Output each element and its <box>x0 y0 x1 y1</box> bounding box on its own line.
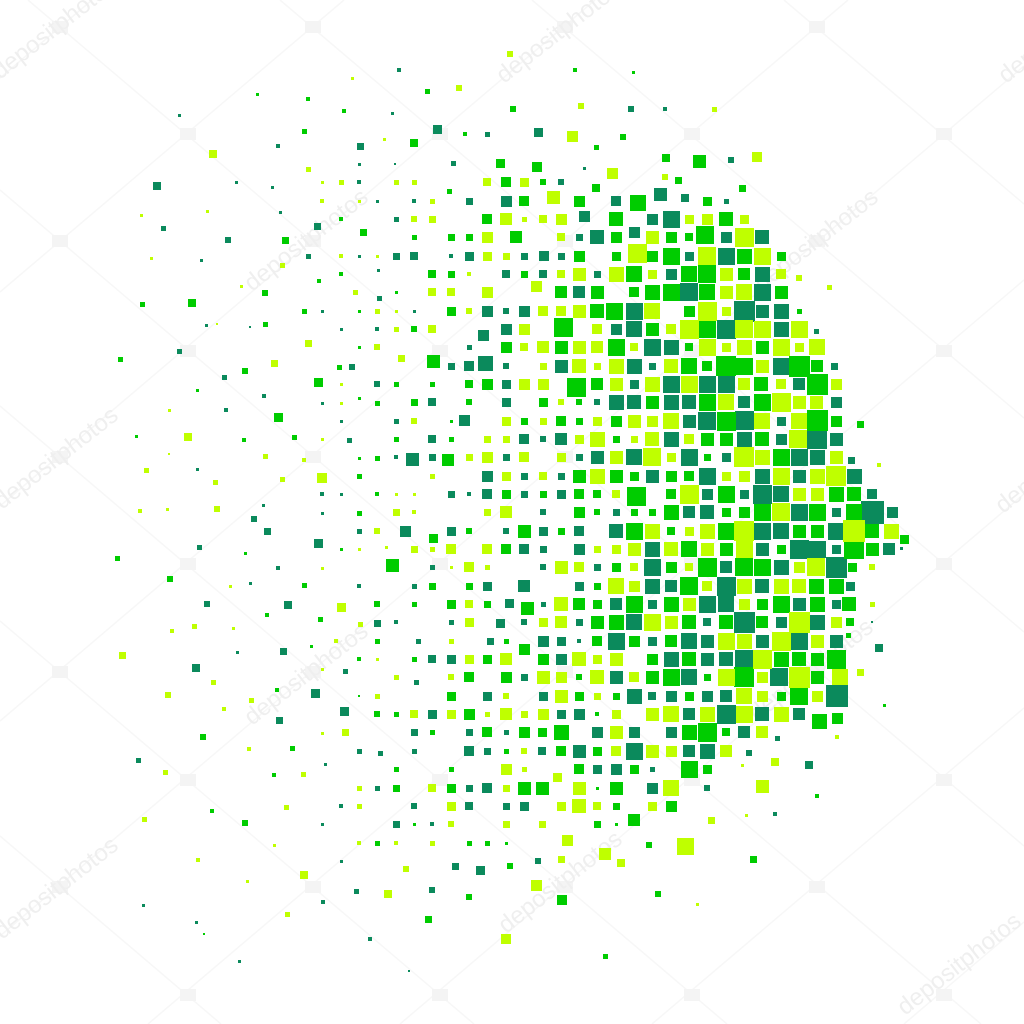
scattered dark green squares <box>136 68 734 972</box>
dense mosaic: face profile <box>385 177 909 855</box>
face: lime squares <box>385 178 899 855</box>
watermark text: depositphotos <box>239 617 373 731</box>
face: dark green squares <box>393 179 903 826</box>
face: mid green squares <box>386 177 909 848</box>
watermark text: depositphotos <box>749 183 883 297</box>
scattered mid green squares <box>115 68 757 959</box>
watermark text: depositphotos <box>892 907 1024 1021</box>
watermark text: depositphotos <box>744 613 878 727</box>
watermark text: depositphotos <box>239 183 373 297</box>
watermark text: depositphotos <box>493 825 627 939</box>
scattered lime squares <box>119 51 762 944</box>
scattered particles: left, top and bottom <box>115 51 762 972</box>
